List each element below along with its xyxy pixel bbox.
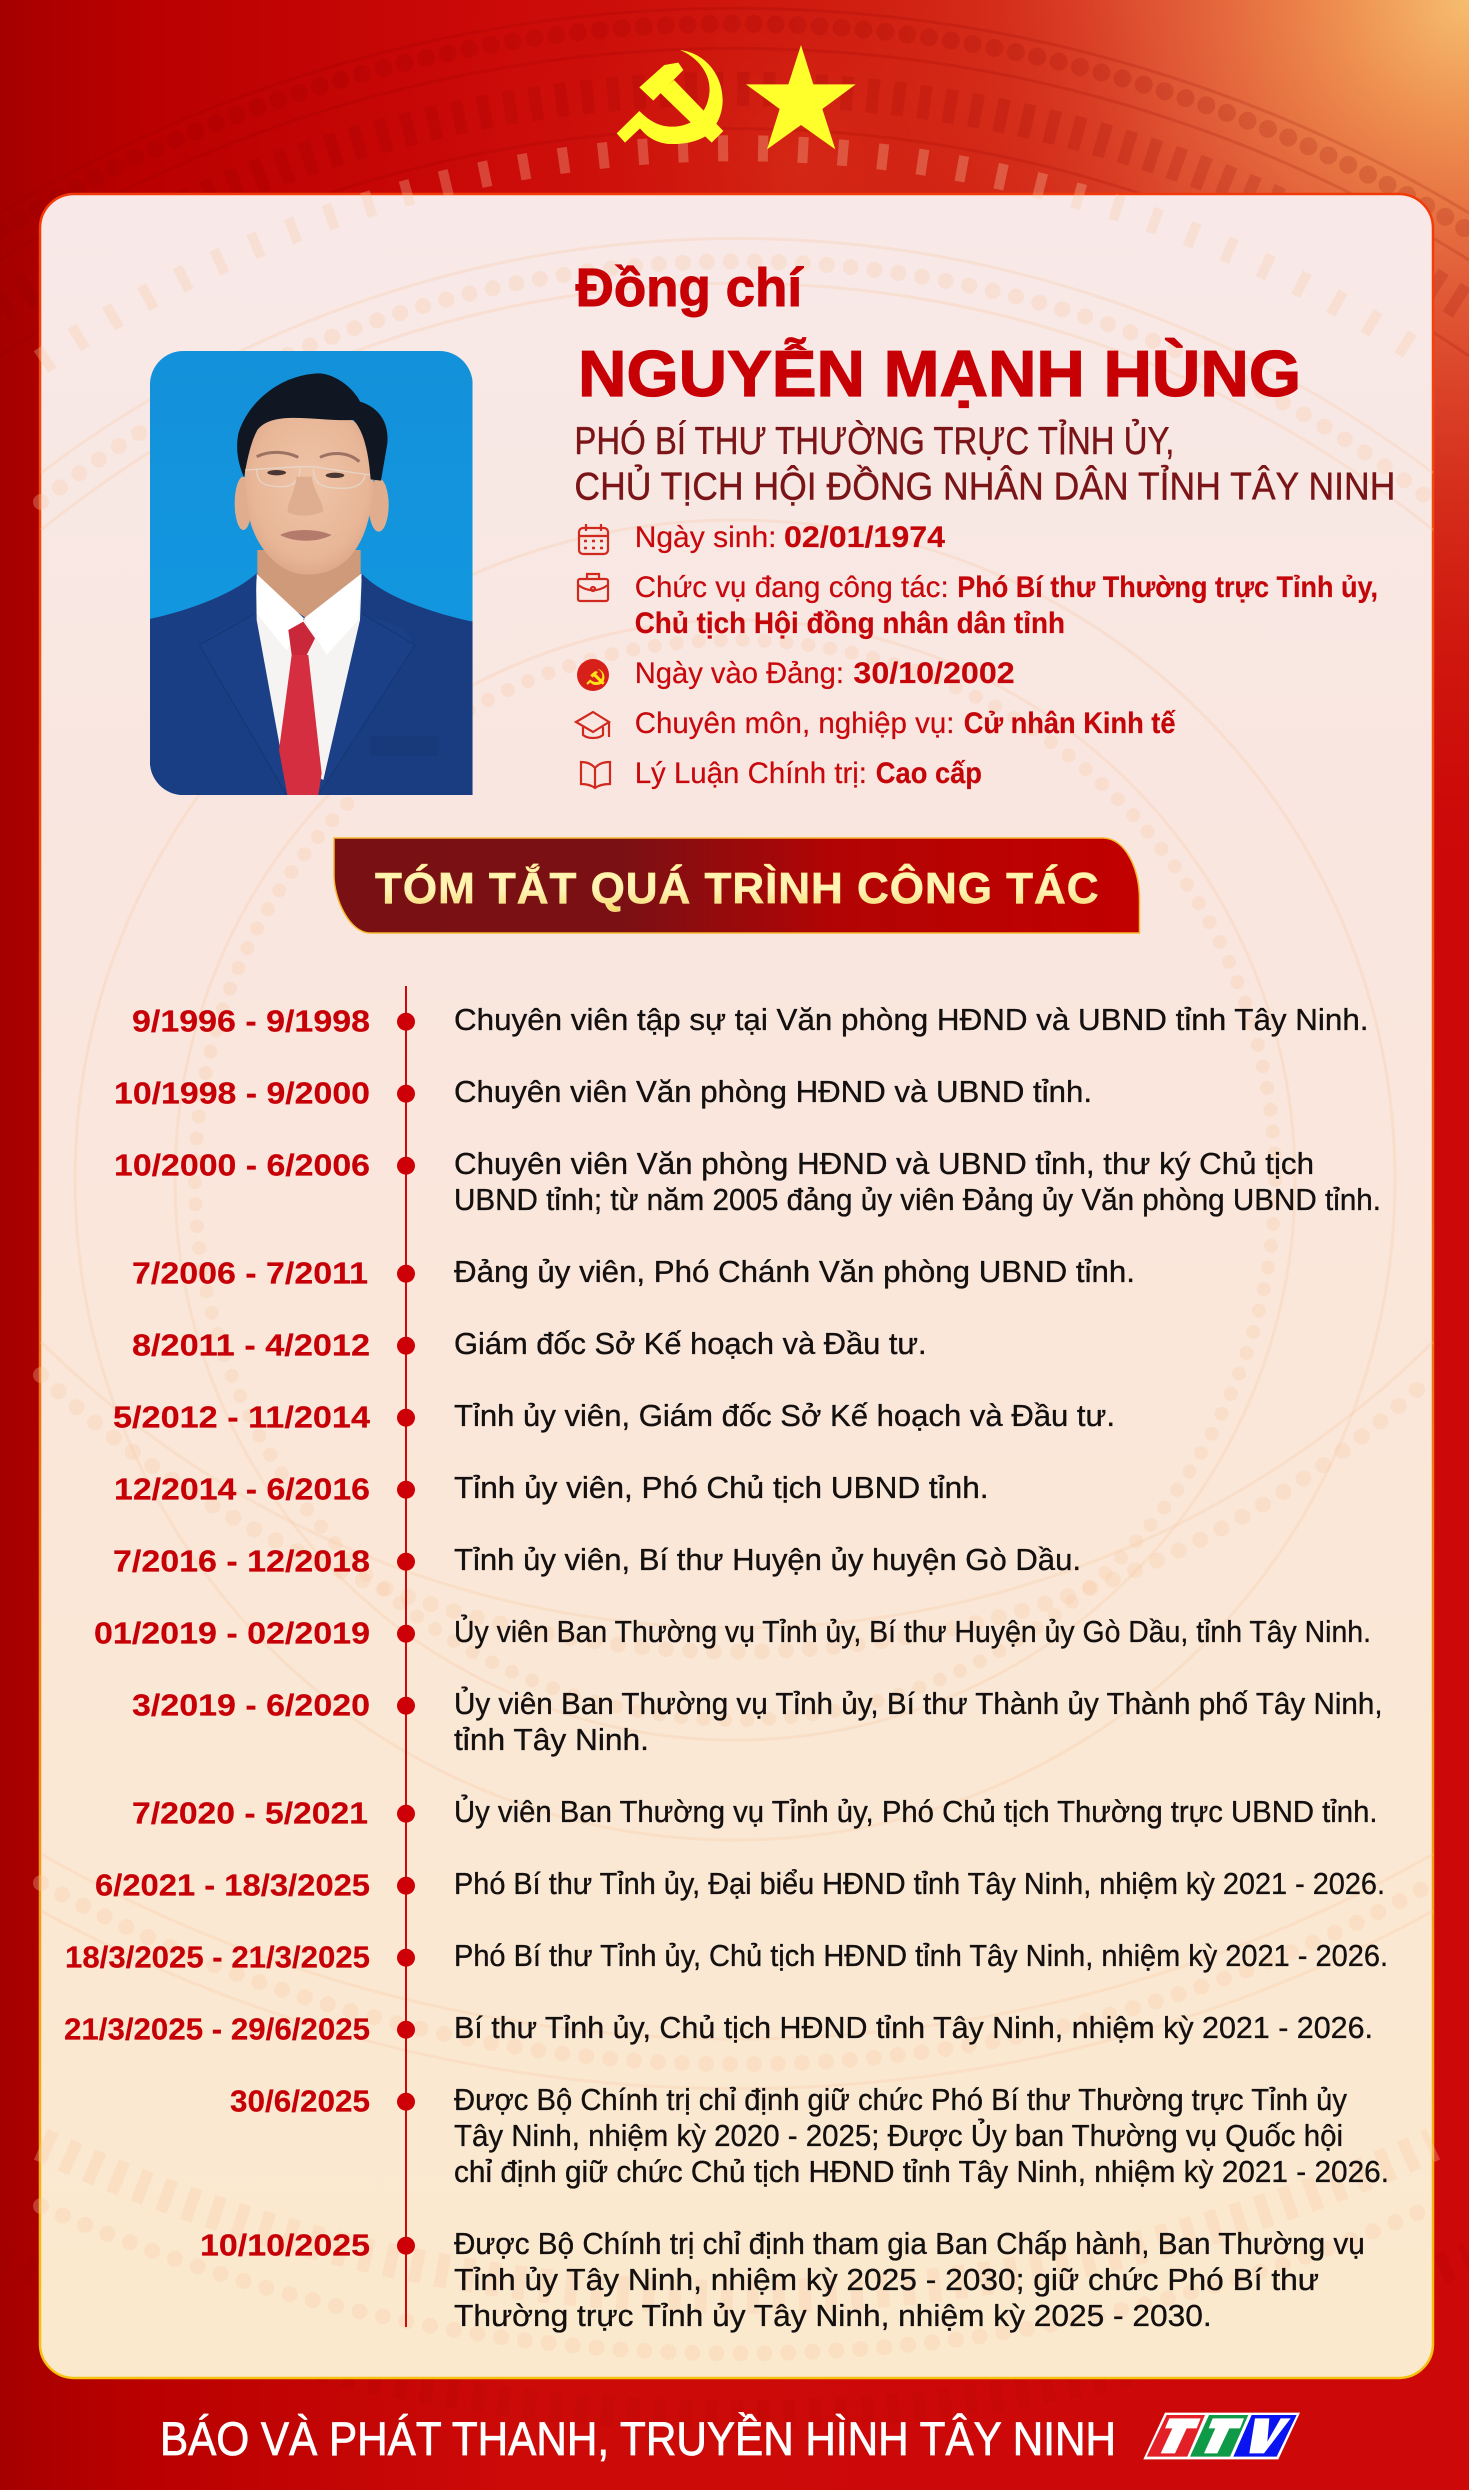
heading: name: NGUYỄN MẠNH HÙNG: [578, 337, 1301, 410]
timeline entry 8: 7/2016 - 12/2018: [113, 1544, 370, 1579]
timeline entry 3: UBND tỉnh; từ năm 2005 đảng ủy viên Đảng ủy Văn phòng UBND tỉnh.: [454, 1182, 1381, 1217]
timeline entry 14: 21/3/2025 - 29/6/2025: [64, 2012, 370, 2047]
icon: star: [746, 45, 856, 149]
subtitle: positions: [574, 419, 1395, 509]
text: political theory: Cao cấp: [876, 757, 982, 790]
timeline entry 8: [113, 1542, 1081, 1579]
timeline entry 1: Chuyên viên tập sự tại Văn phòng HĐND và UBND tỉnh Tây Ninh.: [454, 1002, 1368, 1037]
timeline entry 2: [114, 1074, 1092, 1111]
text: party join date: Ngày vào Đảng:: [635, 657, 844, 690]
text: current position: Chức vụ đang công tác:: [635, 571, 949, 604]
timeline entry 4: 7/2006 - 7/2011: [132, 1256, 368, 1291]
text: current position: Chủ tịch Hội đồng nhân dân tỉnh: [635, 607, 1065, 640]
timeline entry 13: 18/3/2025 - 21/3/2025: [65, 1940, 370, 1975]
timeline entry 9: 01/2019 - 02/2019: [94, 1616, 370, 1651]
timeline entry 15: Tây Ninh, nhiệm kỳ 2020 - 2025; Được Ủy ban Thường vụ Quốc hội: [454, 2117, 1343, 2153]
text: party join date: [635, 657, 1015, 690]
timeline entry 5: 8/2011 - 4/2012: [132, 1328, 370, 1363]
info list: [576, 521, 1378, 790]
timeline: [64, 986, 1389, 2333]
timeline axis: [405, 986, 407, 2327]
portrait photo: [150, 351, 473, 795]
timeline entry 9: Ủy viên Ban Thường vụ Tỉnh ủy, Bí thư Huyện ủy Gò Dầu, tỉnh Tây Ninh.: [454, 1613, 1371, 1649]
icon: calendar: [579, 524, 608, 554]
timeline entry 15: chỉ định giữ chức Chủ tịch HĐND tỉnh Tây Ninh, nhiệm kỳ 2021 - 2026.: [454, 2154, 1389, 2189]
timeline entry 15: 30/6/2025: [230, 2084, 370, 2119]
timeline entry 13: Phó Bí thư Tỉnh ủy, Chủ tịch HĐND tỉnh Tây Ninh, nhiệm kỳ 2021 - 2026.: [454, 1938, 1388, 1973]
timeline entry 16: Thường trực Tỉnh ủy Tây Ninh, nhiệm kỳ 2025 - 2030.: [454, 2298, 1212, 2333]
text: qualification: Cử nhân Kinh tế: [964, 707, 1176, 740]
text: birth date: [635, 521, 945, 554]
timeline entry 16: Tỉnh ủy Tây Ninh, nhiệm kỳ 2025 - 2030; giữ chức Phó Bí thư: [454, 2262, 1319, 2297]
logo: TTV: [1143, 2413, 1300, 2459]
timeline entry 14: Bí thư Tỉnh ủy, Chủ tịch HĐND tỉnh Tây Ninh, nhiệm kỳ 2021 - 2026.: [454, 2010, 1373, 2045]
icon: party emblem: [577, 659, 609, 691]
banner: section title: TÓM TẮT QUÁ TRÌNH CÔNG TÁC: [375, 862, 1098, 913]
timeline entry 3: [114, 1146, 1381, 1217]
timeline entry 1: 9/1996 - 9/1998: [132, 1004, 370, 1039]
timeline entry 11: [132, 1793, 1378, 1831]
timeline entry 12: Phó Bí thư Tỉnh ủy, Đại biểu HĐND tỉnh Tây Ninh, nhiệm kỳ 2021 - 2026.: [454, 1866, 1385, 1901]
timeline entry 3: Chuyên viên Văn phòng HĐND và UBND tỉnh, thư ký Chủ tịch: [454, 1146, 1314, 1181]
timeline entry 10: [132, 1685, 1383, 1757]
text: party join date: 30/10/2002: [853, 657, 1015, 690]
text: political theory: Lý Luận Chính trị:: [635, 757, 867, 790]
timeline entry 10: Ủy viên Ban Thường vụ Tỉnh ủy, Bí thư Thành ủy Thành phố Tây Ninh,: [454, 1685, 1383, 1721]
text: current position: [635, 571, 1378, 640]
footer text: BÁO VÀ PHÁT THANH, TRUYỀN HÌNH TÂY NINH: [160, 2412, 1116, 2465]
text: qualification: [635, 707, 1176, 740]
timeline entry 4: Đảng ủy viên, Phó Chánh Văn phòng UBND tỉnh.: [454, 1254, 1135, 1289]
timeline entry 16: 10/10/2025: [200, 2228, 370, 2263]
timeline entry 6: Tỉnh ủy viên, Giám đốc Sở Kế hoạch và Đầu tư.: [454, 1398, 1115, 1433]
icon: briefcase: [578, 574, 608, 601]
timeline entry 16: [200, 2226, 1365, 2333]
text: current position: Phó Bí thư Thường trực Tỉnh ủy,: [957, 571, 1378, 604]
timeline entry 6: [113, 1398, 1115, 1435]
banner: section title: [334, 838, 1140, 933]
timeline entry 8: Tỉnh ủy viên, Bí thư Huyện ủy huyện Gò Dầu.: [454, 1542, 1081, 1577]
icon: book: [581, 762, 610, 788]
icon: graduation cap: [576, 712, 609, 738]
timeline entry 6: 5/2012 - 11/2014: [113, 1400, 371, 1435]
subtitle: positions: CHỦ TỊCH HỘI ĐỒNG NHÂN DÂN TỈNH TÂY NINH: [574, 465, 1395, 509]
timeline entry 2: 10/1998 - 9/2000: [114, 1076, 370, 1111]
heading: Đồng chí: Đồng chí: [576, 258, 804, 318]
text: birth date: Ngày sinh:: [635, 521, 776, 554]
timeline entry 10: 3/2019 - 6/2020: [132, 1688, 370, 1723]
timeline entry 9: [94, 1613, 1371, 1651]
timeline entry 2: Chuyên viên Văn phòng HĐND và UBND tỉnh.: [454, 1074, 1092, 1109]
timeline entry 4: [132, 1254, 1135, 1291]
timeline entry 12: [95, 1866, 1385, 1903]
timeline entry 16: Được Bộ Chính trị chỉ định tham gia Ban Chấp hành, Ban Thường vụ: [454, 2226, 1365, 2261]
timeline entry 7: 12/2014 - 6/2016: [114, 1472, 370, 1507]
text: birth date: 02/01/1974: [784, 521, 945, 554]
timeline entry 12: 6/2021 - 18/3/2025: [95, 1868, 370, 1903]
timeline entry 3: 10/2000 - 6/2006: [114, 1148, 370, 1183]
timeline entry 10: tỉnh Tây Ninh.: [454, 1722, 649, 1757]
text: qualification: Chuyên môn, nghiệp vụ:: [635, 707, 954, 740]
icon: hammer and sickle: [617, 50, 723, 144]
timeline entry 15: Được Bộ Chính trị chỉ định giữ chức Phó Bí thư Thường trực Tỉnh ủy: [454, 2082, 1347, 2117]
timeline entry 13: [65, 1938, 1388, 1975]
timeline entry 7: Tỉnh ủy viên, Phó Chủ tịch UBND tỉnh.: [454, 1470, 988, 1505]
timeline entry 14: [64, 2010, 1373, 2047]
timeline entry 11: Ủy viên Ban Thường vụ Tỉnh ủy, Phó Chủ tịch Thường trực UBND tỉnh.: [454, 1793, 1378, 1829]
timeline entry 11: 7/2020 - 5/2021: [132, 1796, 368, 1831]
timeline entry 7: [114, 1470, 988, 1507]
subtitle: positions: PHÓ BÍ THƯ THƯỜNG TRỰC TỈNH ỦY,: [574, 419, 1174, 463]
timeline entry 5: Giám đốc Sở Kế hoạch và Đầu tư.: [454, 1326, 927, 1361]
text: political theory: [635, 757, 982, 790]
timeline entry 5: [132, 1326, 927, 1363]
timeline entry 15: [230, 2082, 1389, 2189]
